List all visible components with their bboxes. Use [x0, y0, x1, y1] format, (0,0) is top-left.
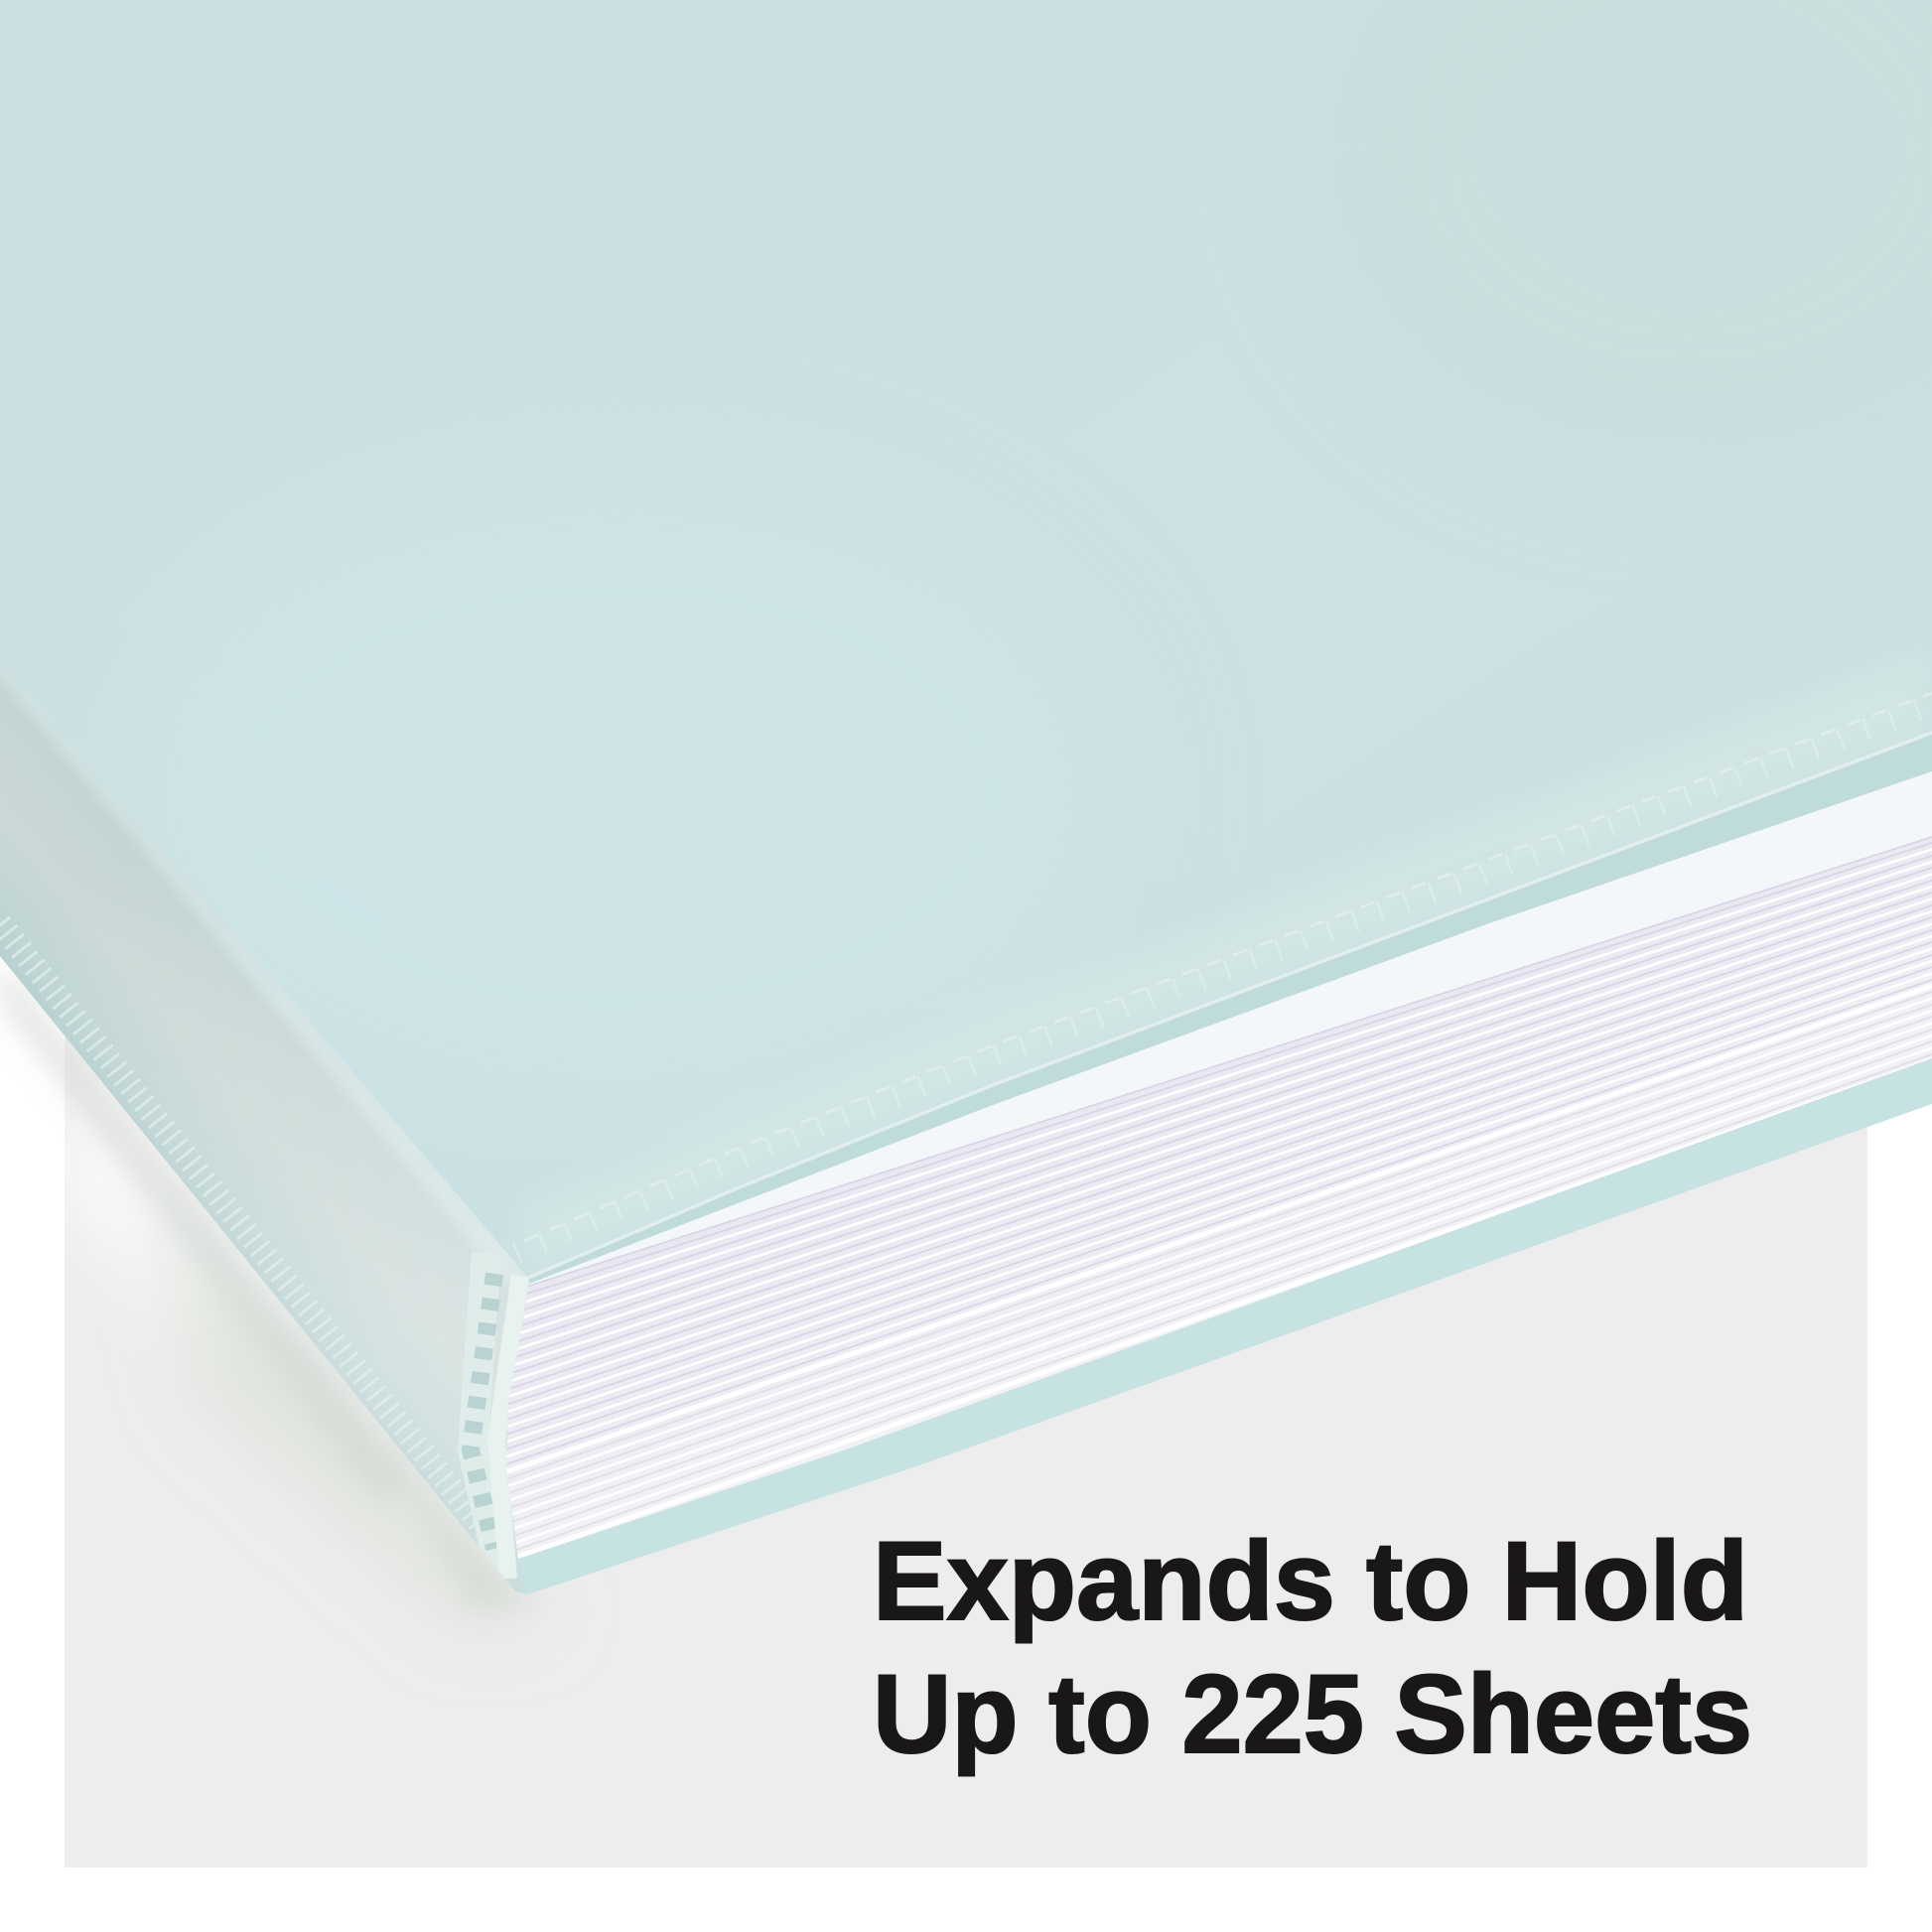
paper stack [501, 771, 1932, 1569]
flap edge and stitching [516, 693, 1932, 1278]
cover highlight [651, 719, 1894, 1187]
back cover [515, 1042, 1932, 1594]
spine [0, 658, 529, 1594]
front cover [0, 0, 1932, 1278]
ribbed folder end [471, 1253, 520, 1579]
spine ribs [0, 923, 496, 1544]
shadow band under flap [528, 733, 1932, 1284]
headline: Up to 225 Sheets [873, 1652, 1752, 1776]
headline [873, 1519, 1752, 1776]
soft glow and shadow under folder [0, 958, 556, 1628]
headline: Expands to Hold [873, 1519, 1748, 1643]
